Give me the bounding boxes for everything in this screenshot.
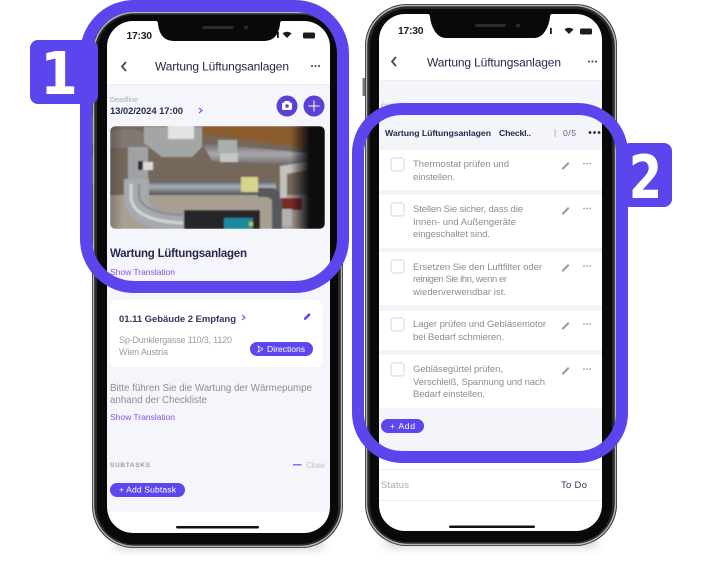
phone shadows: [115, 538, 597, 548]
checklist item 3: [379, 252, 602, 305]
header more dots: [588, 60, 597, 63]
phone 1 screen: [107, 21, 330, 533]
checklist item 3: reinigen Sie ihn, wenn er: [413, 274, 507, 285]
phone 2 frame: [362, 4, 617, 546]
checklist item 3: wiederverwendbar ist.: [412, 287, 506, 298]
location card: 01.11 Gebäude 2 Empfang: [119, 314, 236, 325]
checklist item 2: Stellen Sie sicher, dass die: [413, 204, 523, 215]
phone 2 speaker and camera: [475, 24, 520, 28]
checklist item 4: bei Bedarf schmieren.: [413, 332, 504, 343]
badge 1: 1: [40, 40, 78, 109]
phone 2: [362, 4, 617, 546]
checklist item 5: Gebläsegürtel prüfen,: [413, 364, 503, 375]
checklist header: Wartung Lüftungsanlagen: [385, 128, 491, 138]
add subtask button: [110, 483, 185, 497]
checklist item 3: Ersetzen Sie den Luftfilter oder: [413, 262, 542, 273]
checklist item 5: Bedarf einstellen.: [413, 389, 485, 400]
location card: Sp-Dunklergasse 110/3, 1120: [119, 335, 232, 345]
status bar time: 17:30: [398, 26, 424, 37]
checklist item 4: Lager prüfen und Gebläsemotor: [413, 319, 546, 330]
subtasks heading: SUBTASKS: [110, 462, 151, 469]
close control: Close: [306, 461, 326, 470]
status bar time: 17:30: [126, 31, 152, 42]
directions button: Directions: [267, 344, 305, 354]
phone 1 home indicator: [176, 526, 259, 528]
checklist item 1: [379, 150, 602, 190]
phone 1 notch: [152, 15, 286, 41]
description: [110, 384, 312, 403]
status icons: [550, 28, 592, 34]
description: anhand der Checkliste: [110, 395, 208, 406]
show translation link: Show Translation: [110, 267, 175, 277]
show translation link: Show Translation: [110, 412, 175, 422]
close control: [293, 462, 324, 468]
badge 2: [622, 143, 672, 212]
checklist item 1: Thermostat prüfen und: [413, 159, 509, 170]
status row: Status: [381, 480, 409, 491]
header title: Wartung Lüftungsanlagen: [427, 56, 561, 70]
phone 2 screen: [379, 14, 602, 531]
deadline: Deadline: [110, 97, 138, 104]
camera button: [276, 96, 298, 116]
phone 2 home indicator: [449, 526, 535, 528]
status row: [382, 482, 587, 488]
task title: Wartung Lüftungsanlagen: [110, 248, 247, 260]
header more dots: [311, 65, 320, 67]
checklist item 4: [379, 311, 602, 350]
description: Bitte führen Sie die Wartung der Wärmepumpe: [110, 383, 313, 394]
location card: Wien Austria: [119, 347, 168, 357]
checklist item 2: [379, 195, 602, 248]
checklist header: 0/5: [563, 128, 576, 138]
phone 2 notch: [424, 9, 556, 38]
photo of ventilation ducts: [110, 126, 325, 229]
checklist header: [385, 129, 600, 138]
phone 1 frame: [91, 11, 343, 548]
header title: Wartung Lüftungsanlagen: [155, 60, 289, 74]
status icons: [277, 32, 315, 38]
header back chevron: [392, 57, 396, 66]
header back chevron: [122, 62, 126, 71]
deadline: 13/02/2024 17:00: [110, 106, 183, 117]
checklist header: Checkl..: [499, 128, 531, 138]
badge 2: 2: [629, 143, 662, 212]
deadline: [110, 96, 203, 114]
phone 1 speaker and camera: [202, 26, 248, 30]
checklist item 2: eingeschaltet sind.: [413, 229, 490, 240]
add button: + Add: [390, 421, 415, 431]
checklist item 2: Innen- und Außengeräte: [413, 217, 516, 228]
highlight ring 2: [358, 109, 622, 457]
add subtask button: + Add Subtask: [119, 484, 177, 494]
checklist item 5: [379, 355, 602, 408]
directions button: [250, 342, 313, 356]
checklist item 1: einstellen.: [413, 172, 455, 183]
status row: To Do: [561, 480, 587, 491]
checklist section label: CHECKLIST: [381, 103, 425, 110]
phone 1: [91, 11, 343, 548]
plus button: [304, 96, 324, 116]
location card: [110, 300, 322, 367]
badge 1: [30, 40, 98, 109]
highlight ring 1: [86, 6, 343, 287]
add button: [381, 419, 424, 433]
checklist item 5: Verschleiß, Spannung und nach: [413, 377, 545, 388]
